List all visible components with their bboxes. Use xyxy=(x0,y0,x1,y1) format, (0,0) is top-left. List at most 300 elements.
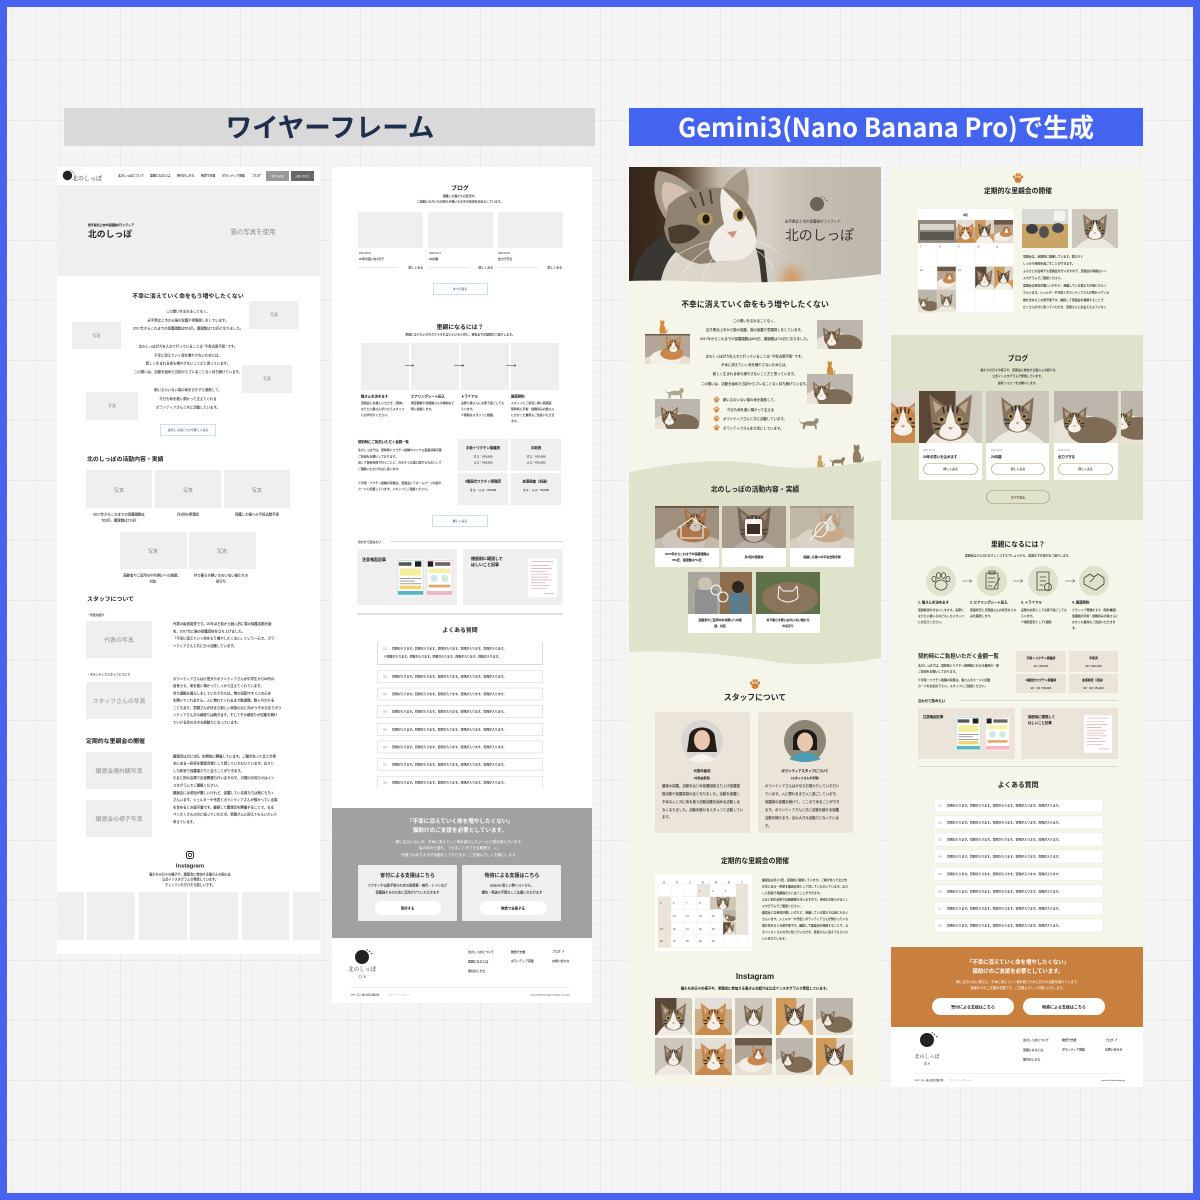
activity card: monthly meetings xyxy=(722,495,786,567)
support panel: 皆の街の土猫も、できることをできる範囲で、に、 xyxy=(419,845,501,850)
FAQ section: よくある質問 xyxy=(998,780,1039,789)
adoption steps section: 里親になるには？ xyxy=(436,323,484,331)
intro photos xyxy=(72,301,299,420)
instagram section: Instagram xyxy=(176,863,204,869)
meeting text: 猫を含めるとお留守番です。継続して里親会を開催することで、 xyxy=(1023,297,1106,302)
adoption steps section: 家庭状況と日程猫さんの状況を入れ xyxy=(970,607,1016,612)
calendar: 28 xyxy=(686,940,689,943)
hero photo of cat xyxy=(629,167,881,293)
FAQ section: Q8. xyxy=(383,780,388,784)
adoption meeting section: 定期的な里親会の開催 xyxy=(86,737,145,745)
cream wave xyxy=(629,274,881,470)
adoption steps section: 便宜観察や当個猫さんの体制など xyxy=(411,400,454,405)
blog section xyxy=(877,335,1158,520)
meeting text: 里親会は参加が難しいけれど、保護している猫たちが他にもたく xyxy=(1023,282,1107,287)
paw bullet list: ボランティアさんを大切にしています。 xyxy=(723,425,783,430)
nav bar: 北のしっぽについて xyxy=(118,173,144,178)
support panel: amazon 欲しい物リストから、 xyxy=(490,883,534,888)
paw bullet list: 今日も命を救い預かって支える xyxy=(727,407,774,412)
adoption steps section: 時に相談します。 xyxy=(411,406,434,411)
meeting text: さんいます。シェルターや代表とボランティアさんが預かっている xyxy=(1023,290,1109,295)
FAQ section: Q7. xyxy=(383,762,388,766)
calendar: 7 xyxy=(686,902,688,905)
FAQ section: Q4. xyxy=(938,855,943,859)
Gemini footer: 北のしっぽについて xyxy=(1023,1037,1049,1042)
staff section: 「不幸に消えていく命をもう増やしたくない」という一心で、ボラ xyxy=(173,636,274,641)
staff section: ボランティアさんは小型犬やボランティアさんが中学生から60代の xyxy=(173,676,275,681)
intro text: 今日も命を救い預かって支えてくれる xyxy=(159,396,217,401)
fee section: ¥2 / ¥10,000 xyxy=(1085,664,1102,668)
blog section: 猫たちの日々の様子や、里親会に参加する猫さんの紹介は xyxy=(980,367,1056,372)
intro text: この想いを忘れることなく、 xyxy=(166,308,210,313)
button: about: 北のしっぽについて詳しくみる xyxy=(168,427,208,432)
staff section: 代表の写真 xyxy=(104,636,134,644)
staff card: volunteers: ます。ボランティアさんと共に活動を続ける保護 xyxy=(765,807,840,812)
intro photos xyxy=(645,312,863,436)
blog card 3 xyxy=(1054,385,1118,480)
activity card: outdoor cats xyxy=(756,572,820,633)
activity section: 保護した猫への不妊去勢手術 xyxy=(235,511,280,516)
activity card: monthly meetings: 月2回の里親会 xyxy=(745,554,764,559)
support panel xyxy=(332,808,592,938)
wireframe footer: 北のしっぽについて xyxy=(468,949,494,954)
adoption steps section: らいます。 xyxy=(1021,613,1035,618)
staff card: volunteers: ボランティアスタッフについて xyxy=(781,768,829,773)
instagram section: Instagram xyxy=(736,972,774,981)
blog card 2 xyxy=(986,386,1049,480)
fee section: ¥3・¥3 / ¥5,000 xyxy=(1083,686,1104,690)
intro text: 新しく生まれる命も増やさないことだと思っています。 xyxy=(146,361,230,366)
staff card: representative: 最後の保護。活動をはじめ保護団体立ち上げ保護猫 xyxy=(662,783,741,788)
staff card: representative: 不幸な人と共に命を救う活動保護を始める活動しま xyxy=(662,799,740,804)
staff section: め、2017年に猫の保護団体を立ち上げました。 xyxy=(173,628,245,633)
adoption steps section: 保護猫の手術・接種済みの猫さんに xyxy=(1072,613,1118,618)
FAQ section: Q1. xyxy=(938,804,943,808)
fee section: 手術済 xyxy=(531,445,542,450)
calendar: 6 xyxy=(673,902,675,905)
staff section: こともあり、里親さんが決まり新しい家族の元に向かうその日までボラ xyxy=(173,705,281,710)
fee section: 血液検査（別途） xyxy=(1082,677,1105,682)
support panel: 快適ではありますが活動をしております。ご支援よろしくお願いします。 xyxy=(401,852,519,857)
Gemini footer xyxy=(891,1027,1143,1087)
activity section: 北のしっぽの活動内容・実績 xyxy=(711,485,799,494)
intro text: 不幸に消えていく命を増やさないためには、 xyxy=(154,352,222,357)
calendar: 14 xyxy=(686,915,689,918)
adoption steps section: 里親希望の方もいしますす。実際に xyxy=(918,607,964,612)
Gemini footer: 北のしっぽ xyxy=(914,1053,940,1060)
calendar: 26 xyxy=(660,940,663,943)
adoption meeting section: べくたくさんの方に知っていただき、里親さんに迎えてもらいたいと xyxy=(173,812,277,817)
adoption steps section: 猫さんを決めます xyxy=(361,393,389,398)
intro text: 不幸に消えていく命を増やさないためには、 xyxy=(721,362,789,367)
adoption steps section: 実際のお家としてお家で過ごしても xyxy=(1021,607,1067,612)
photo calendar: 7 xyxy=(920,246,922,248)
staff section: ・代表の紹介 xyxy=(87,612,104,617)
green band with wave xyxy=(629,460,881,664)
adoption steps section: 里親会はさんわれますしくスするでしょうから、里親までの流れをご紹介します。 xyxy=(965,552,1071,557)
adoption meeting section: 本にある一軒家を譲渡会場として貸していただいています。広々と xyxy=(173,761,274,766)
activity card: consultation xyxy=(688,572,752,633)
support panel: 物資による支援はこちら xyxy=(485,872,539,879)
button: about xyxy=(160,424,216,436)
activity section: 写真 xyxy=(217,548,227,555)
paw bullet list: 飼い主のいない猫の命を救助して、 xyxy=(723,397,777,402)
nav bar: ブログ xyxy=(252,173,261,178)
FAQ section: よくある質問 xyxy=(442,626,478,634)
calendar: 8 xyxy=(699,902,701,905)
intro text: 新しく生まれる命も増やさないことだと思っています。 xyxy=(713,371,797,376)
adoption steps section: クランイブ登録をする（契約書面） xyxy=(1072,607,1118,612)
intro text: 2017年からこれまでの保護頭数は551匹、譲渡数は711匹になりました。 xyxy=(700,336,810,341)
blog card 2: 20の願 xyxy=(991,454,1002,459)
activity card: surgery: 保護した猫への不妊去勢手術 xyxy=(803,554,841,559)
adoption steps section: 里親会にお越しいただき、団体に xyxy=(361,400,404,405)
FAQ section: ※回答が入ります。回答が入ります。回答が入ります。回答が入ります。回答が入ります。 xyxy=(384,654,501,658)
adoption steps section: なりたい猫いるなどもしたスタッフ xyxy=(918,613,964,618)
blog section: 全力で守る xyxy=(498,256,513,261)
adoption meeting section: 譲渡会は月に2回、定期的に開催しています。ご縁があって北上市里 xyxy=(173,753,277,758)
activity section: 月2回の里親会 xyxy=(177,511,200,516)
related articles: ほしいこと記事 xyxy=(471,561,499,567)
Gemini footer: ボランティア募集 xyxy=(1062,1046,1085,1052)
adoption meeting section: 譲渡会の様子写真 xyxy=(95,815,143,823)
fee section: 契約時にご負担いただく金額一覧 xyxy=(358,439,409,444)
adoption steps section xyxy=(918,540,1118,630)
fee section: 血液検査（別途） xyxy=(522,478,550,484)
adoption meeting section: 譲渡会には参加が難しいけれど、保護している猫たちは他にもたく xyxy=(173,790,274,795)
nav bar: ボランティア募集 xyxy=(222,173,245,178)
adoption meeting text: るべくたくさんの方に知っていただき、里親さんに迎えてもらいた xyxy=(762,929,848,934)
FAQ section: Q3. xyxy=(938,838,943,842)
FAQ section: 質問が入ります。質問が入ります。質問が入ります。質問が入ります。質問が入ります。 xyxy=(947,889,1061,894)
related articles: ほしいこと記事 xyxy=(1028,720,1052,725)
activity section: 北のしっぽの活動内容・実績 xyxy=(87,455,164,463)
blog section: 詳しくみる xyxy=(547,264,562,270)
blog section: 2023.08.24 xyxy=(359,252,372,255)
adoption steps section: にお声がけください。 xyxy=(361,412,390,417)
staff card: volunteers: ボランティアさんはかなりお預かりしていただい xyxy=(765,783,840,788)
support panel: 「不幸に消えていく命を増やしたくない」 xyxy=(407,817,513,825)
calendar: 月 xyxy=(676,880,678,884)
adoption steps section: 2. ヒアリングシート記入 xyxy=(970,599,1008,604)
blog section: 保護した猫たちの近況や、 xyxy=(443,193,477,198)
staff card: volunteers: す。 xyxy=(765,823,771,828)
FAQ section: 質問が入ります。質問が入ります。質問が入ります。質問が入ります。質問が入ります。 xyxy=(392,674,506,678)
activity section: 写真 xyxy=(183,487,193,494)
title banner: wireframe: ワイヤーフレーム xyxy=(226,106,434,145)
adoption meeting section: さんいます。シェルターや代表とボランティアさんが預かっている猫 xyxy=(173,797,278,802)
blog section: ブログ xyxy=(1008,354,1028,362)
fee section: ¥2 / ¥8,000 xyxy=(1034,664,1049,668)
fee section: ご負担をお願いしております。 xyxy=(358,453,398,458)
adoption steps section xyxy=(361,323,559,423)
staff section: ・ボランティアスタッフについて xyxy=(87,671,130,676)
support panel orange: 飼い主のいない猫たち、不幸に消えていく命を救うために日々の活動を続けています。 xyxy=(956,979,1080,984)
related articles xyxy=(918,698,1118,766)
adoption steps section: トライアル xyxy=(461,393,479,398)
intro heading: 不幸に消えていく命をもう増やしたくない xyxy=(681,299,829,309)
wireframe footer: 物資で支援 xyxy=(511,949,526,954)
activity section xyxy=(86,455,290,584)
meeting text xyxy=(1023,253,1109,309)
calendar xyxy=(655,875,752,951)
FAQ section: Q6. xyxy=(383,745,388,749)
staff card: volunteers: (スタッフさんの手術) xyxy=(791,775,819,780)
fee section: オス・メス：¥5,000 xyxy=(470,487,496,492)
intro text: この想いは、活動を始めた当初からブレることなく持ち続けています。 xyxy=(701,381,809,386)
staff card: representative: (中島由里恵) xyxy=(694,775,710,780)
fee section: カードに記載しています。スタッフにご相談ください。 xyxy=(358,486,430,491)
blog section: 是非フォローをお願いします。 xyxy=(998,380,1038,385)
fee section: 3種混合ワクチン接種済 xyxy=(1026,677,1056,682)
instagram section xyxy=(655,972,853,1075)
FAQ section: 質問が入ります。質問が入ります。質問が入ります。質問が入ります。質問が入ります。 xyxy=(392,646,506,650)
fee section: 契約時にご負担いただく金額一覧 xyxy=(918,652,999,660)
FAQ section xyxy=(378,626,542,788)
photo calendar xyxy=(916,209,1015,312)
Gemini footer: プライバシーポリシー xyxy=(950,1078,972,1082)
adoption meeting text: スタグラムでご確認ください。 xyxy=(762,903,802,908)
activity section xyxy=(655,485,854,633)
calendar: 土 xyxy=(741,880,744,884)
fee section: メス：¥18,000 xyxy=(473,460,493,464)
wireframe footer: ブログ ↗ xyxy=(552,948,564,954)
activity section: 写真 xyxy=(114,487,124,494)
adoption steps section: みを確認します。 xyxy=(970,613,993,618)
adoption steps section: 実際に猫さんにお家で過ごしても xyxy=(461,400,504,405)
nav bar: 物資で支援 xyxy=(201,173,216,178)
intro text: 岩手県北上市から猫の保護や里親探しをしています。 xyxy=(148,317,228,322)
blog card 3: 2022.01.15 xyxy=(1058,449,1071,452)
fee section: ¥3・¥3 / ¥5,000 xyxy=(1031,686,1052,690)
Gemini footer: 寄付のしかた xyxy=(1023,1056,1040,1062)
staff section: ンティアさんと共に日々活動しています。 xyxy=(173,643,237,648)
nav bar: 寄付で応援 xyxy=(272,174,284,178)
FAQ section: Q7. xyxy=(938,907,943,911)
adoption steps section: らいます。 xyxy=(461,406,475,411)
Gemini footer: お問い合わせ xyxy=(1105,1046,1122,1052)
photo calendar: 8 xyxy=(939,246,941,248)
FAQ section: Q4. xyxy=(383,710,388,714)
blog section: 20の働 xyxy=(429,256,438,261)
fee section: 詳しくみる xyxy=(453,518,467,523)
adoption meeting section: 譲渡会場外観写真 xyxy=(95,767,143,775)
blog section: 公式インスタグラムで発信しています。 xyxy=(992,373,1044,378)
adoption meeting section: スタグラムでご確認ください。 xyxy=(173,783,220,788)
calendar: 20 xyxy=(673,928,676,931)
title banner: wireframe xyxy=(64,106,595,146)
blog card 1: 2023.03.21 xyxy=(923,449,936,452)
fee section: 3種混合ワクチン接種済 xyxy=(465,478,502,484)
activity card: rescued xyxy=(655,495,719,567)
adoption meeting section: たまに別の会場で出張開催も行いますので、月間のお知らせはイン xyxy=(173,775,275,780)
activity section: 見守り xyxy=(216,579,226,584)
calendar: 21 xyxy=(686,928,689,931)
support panel orange: 物資による支援はこちら xyxy=(1042,1003,1086,1009)
nav bar: お問い合わせ xyxy=(295,174,310,178)
adoption meeting text: いと考えています。 xyxy=(762,936,788,940)
calendar: 22 xyxy=(699,928,702,931)
hero placeholder: 岩手県北上市の保護猫ボランティア xyxy=(88,222,134,227)
related articles: 合わせて読みたい xyxy=(358,539,381,544)
intro text: 2017年からこれまでの保護頭数は551匹、譲渡数は711匹になりました。 xyxy=(133,326,243,331)
panel: wireframe page left xyxy=(57,167,320,954)
wireframe footer: お問い合わせ xyxy=(552,958,569,963)
panel: wireframe page right xyxy=(332,167,592,1003)
FAQ section: 質問が入ります。質問が入ります。質問が入ります。質問が入ります。質問が入ります。 xyxy=(947,906,1061,911)
blog section: ブログ xyxy=(451,184,469,192)
intro text: 飼い主のいない猫の命をひたすら救助して、 xyxy=(154,387,222,392)
Gemini footer: ブログ ↗ xyxy=(1105,1037,1117,1042)
support panel: 寄付による支援はこちら xyxy=(380,872,435,879)
blog card 1 xyxy=(919,386,982,480)
support panel: ワクチンや去勢手術のための医療費・病代・トイレなど xyxy=(368,883,448,888)
blog card 3: 全力で守る xyxy=(1058,454,1075,459)
staff card: volunteers: 活動を続けます。会の大きな活動力となっていま xyxy=(765,815,839,820)
FAQ section: Q2. xyxy=(383,674,388,678)
fee section: 手術＋ワクチン接種済 xyxy=(1027,655,1056,660)
panel: Gemini page left xyxy=(629,167,881,1087)
adoption steps section: ※期間目安として1週間 xyxy=(1021,619,1052,624)
activity card: outdoor cats: の見守り xyxy=(782,623,794,628)
activity card: rescued: 551匹、譲渡数は711匹 xyxy=(672,557,702,562)
activity card: rescued: 2017年からこれまでの保護頭数は xyxy=(665,551,709,556)
adoption steps section: ます。 xyxy=(511,418,519,423)
adoption steps section: 里親になるには？ xyxy=(991,540,1045,548)
related articles: 注意喚起記事 xyxy=(362,556,386,562)
calendar: 5 xyxy=(660,902,662,905)
adoption meeting text: たまに別の会場で出張開催も行いますので、月間のお知らせはイン xyxy=(762,896,849,902)
intro text xyxy=(133,308,243,410)
activity card: consultation: 談、対応 xyxy=(714,623,726,628)
fee section: 北のしっぽでは、契約時にワクチン接種やマイクロ装着済等可能 xyxy=(358,447,442,452)
adoption steps section: ヒアリングシート記入 xyxy=(411,393,446,398)
activity section: 写真 xyxy=(252,487,262,494)
calendar: 2 xyxy=(712,890,714,893)
related articles: 施設前に確認して xyxy=(471,555,503,561)
adoption steps section: 契約時に手術・接種済みの猫さん xyxy=(511,406,554,411)
adoption steps section: にお伝えください。 xyxy=(918,619,944,624)
hero logo and title: 北のしっぽ xyxy=(785,228,854,243)
FAQ section: Q1. xyxy=(383,646,388,650)
intro text: この想いを忘れることなく、 xyxy=(733,318,777,323)
adoption steps section: 準備になりもいけれどどうすればいいいかと共に、現在までの契約がご紹介します。 xyxy=(405,331,515,336)
calendar: 金 xyxy=(728,880,731,884)
calendar: 23 xyxy=(712,928,715,931)
adoption steps section: スタッフにご来宅し問い家庭面 xyxy=(511,400,552,405)
blog card 2: 2022.02.07 xyxy=(991,449,1004,452)
FAQ section: 質問が入ります。質問が入ります。質問が入ります。質問が入ります。質問が入ります。 xyxy=(947,803,1061,808)
intro text xyxy=(700,318,810,386)
blog card 1: 20年の思いを込めます xyxy=(923,454,958,459)
activity section: 551匹、譲渡数は711匹 xyxy=(102,518,137,523)
hero placeholder: 北のしっぽ xyxy=(88,228,132,239)
staff section: を開いてくれません。人に慣れてくれるまで数週間、数ヶ月かかる xyxy=(173,698,274,703)
fee section: ※手術・ワクチン接種の有無は、里親会にてホームページの紹介 xyxy=(358,480,442,485)
instagram section: 猫たちの日々の様子や、里親会に参加する猫さんの紹介は公式インスタグラムで発信しています。 xyxy=(681,985,829,990)
intro photos: 写真 xyxy=(108,402,116,408)
fee section: ご負担をお願いしております。 xyxy=(918,669,958,674)
instagram section: 公式インスタグラムで発信しています。 xyxy=(162,877,218,882)
activity card: outdoor cats: 外で暮らす飼い主のいない猫たち xyxy=(766,617,810,622)
activity section: 高齢者やご近所の中共飼いへの相談、 xyxy=(123,572,181,577)
staff section: ンティアさん方の頑張りは続きます。そしてその頑張りが活動を続け xyxy=(173,712,278,717)
Gemini footer: contact@kitanoshippo.jp xyxy=(1101,1079,1126,1082)
FAQ section: 質問が入ります。質問が入ります。質問が入ります。質問が入ります。質問が入ります。 xyxy=(947,820,1061,825)
cat silhouettes xyxy=(660,320,864,468)
FAQ section: Q8. xyxy=(938,924,943,928)
fee section: ご理解いただけれはと思います。 xyxy=(358,466,401,471)
fee section: オス・メス：¥5,000 xyxy=(523,487,549,492)
adoption steps section: 3. トライアル xyxy=(1021,599,1042,604)
fee section: 決して保有利用で行うことに、ののそうな猫に関するものとして xyxy=(358,459,442,464)
FAQ section xyxy=(934,780,1103,932)
support panel orange: 皆様からのご支援が必要です。ご支援よろしくお願いいたします。 xyxy=(971,985,1065,990)
support panel: 保護猫たちのために活用させていただきます xyxy=(376,890,439,895)
step icons xyxy=(926,566,1109,596)
blog section: 詳しくみる xyxy=(478,264,493,270)
instagram section: チェックいただけたら嬉しいです。 xyxy=(165,882,215,887)
staff section: スタッフについて xyxy=(87,595,134,603)
adoption meeting text: 譲渡会には参加が難しいけれど、保護している猫たちは他にもたく xyxy=(762,910,849,914)
blog card 2: 詳しくみる xyxy=(1011,466,1025,471)
wireframe footer: 北のしっぽ xyxy=(348,965,376,973)
adoption meeting text: した和室で保護猫たちと会うことができます。 xyxy=(762,890,822,895)
meeting text: たくさんの方に知っていただき、里親さんと出会えるようになっ xyxy=(1023,304,1107,309)
support panel: 寄付する xyxy=(401,905,414,910)
staff card: representative: 猫活動や保護猫猫の会となりました。活動を保護し xyxy=(662,791,740,796)
staff heading: スタッフについて xyxy=(724,692,786,702)
Gemini footer: 里親になるには xyxy=(1023,1047,1043,1052)
adoption meeting text: さんいます。シェルターや代表とボランティアさんが預かっている xyxy=(762,916,848,921)
staff section: スタッフさんの写真 xyxy=(92,697,146,705)
related articles: 施設前に確認して xyxy=(1028,714,1055,719)
fee section: 手術済 xyxy=(1089,655,1098,660)
adoption meeting section: 考えています。 xyxy=(173,819,196,824)
FAQ section: Q6. xyxy=(938,890,943,894)
staff section: 外で過酷な暮らしをしていた子たちは、物の気配ですぐ人の心を xyxy=(173,690,271,695)
photo calendar: 14 xyxy=(958,269,961,272)
fee section: ※手術・ワクチン接種の有無は、猫さんのカードに記載 xyxy=(918,677,990,682)
wireframe footer: ◎ X xyxy=(358,973,366,979)
wireframe footer: 寄付のしかた xyxy=(468,968,485,973)
nav bar: 寄付のしかた xyxy=(177,173,194,178)
FAQ section: 質問が入ります。質問が入ります。質問が入ります。質問が入ります。質問が入ります。 xyxy=(392,744,506,749)
calendar: 1 xyxy=(699,890,701,893)
meeting text: ふるさとの会場でも里親会を行いますので、里親会の情報はイン xyxy=(1023,268,1107,273)
photo calendar: 13 xyxy=(920,269,923,272)
meeting text: スタグラムでご確認ください。 xyxy=(1023,275,1063,280)
staff card: representative: ます。 xyxy=(662,814,672,819)
support panel orange: 猫助けのご支援を必要としています。 xyxy=(973,967,1063,975)
meeting text: 里親会は、定期的に開催しています。猫たちと xyxy=(1023,253,1083,258)
photo calendar: 10 xyxy=(977,246,980,248)
support panel: 猫助けのご支援を必要としています。 xyxy=(413,826,507,834)
adoption steps section: す。 xyxy=(1072,625,1078,630)
staff card: representative: なくなりました。活動を続けるスタッフと活動してい xyxy=(662,807,744,812)
fee section: オス：¥15,000 xyxy=(473,454,493,458)
wireframe footer xyxy=(348,948,570,996)
staff heading xyxy=(724,679,786,702)
paw bullet list xyxy=(714,397,787,430)
adoption meeting text: の本にある一軒家を譲渡会場として貸していただいています。広々 xyxy=(762,884,848,888)
related articles xyxy=(357,539,563,605)
photo calendar: 8月 xyxy=(963,212,968,217)
FAQ section: 質問が入ります。質問が入ります。質問が入ります。質問が入ります。質問が入ります。 xyxy=(392,691,506,696)
intro text: 北のしっぽが力を入れて行っていることは "不妊去勢手術" です。 xyxy=(706,354,804,358)
support panel orange xyxy=(891,947,1143,1027)
adoption steps section: 1. 猫さんを決めます xyxy=(918,599,950,604)
